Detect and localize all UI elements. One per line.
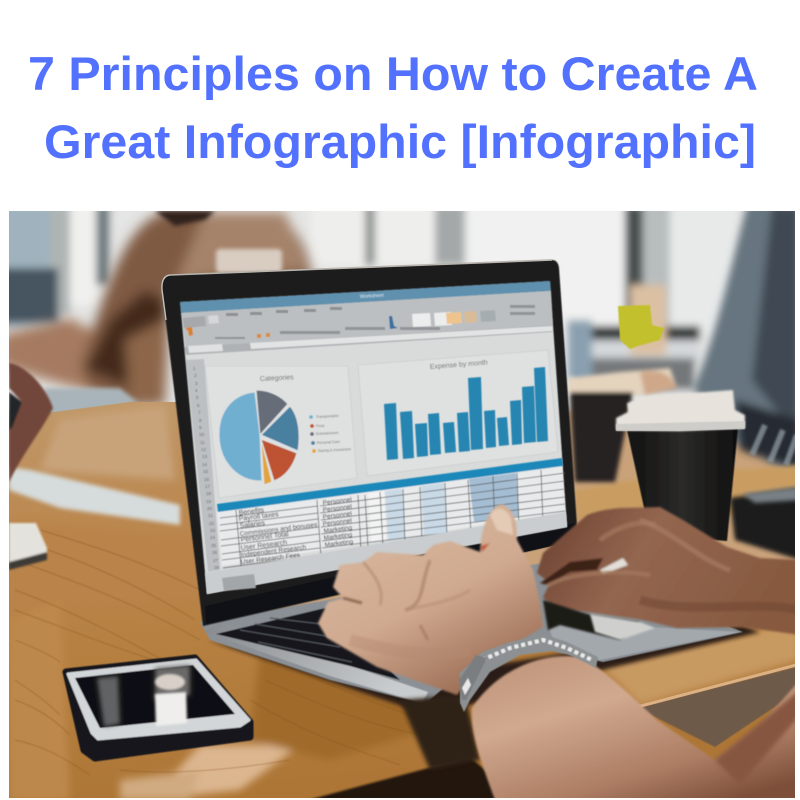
panel: expense chart (358, 350, 558, 476)
row numbers: 2 (194, 373, 197, 378)
table row labels: Commissions and bonuses (239, 521, 318, 538)
laptop screen (180, 281, 567, 594)
person sleeve right (693, 205, 800, 480)
table row labels (238, 507, 318, 566)
row numbers: 27 (213, 558, 219, 563)
photo: person working on a laptop at a wooden table (0, 200, 800, 800)
striped shirt (752, 425, 797, 465)
wooden table (9, 402, 800, 800)
ribbon (181, 291, 553, 349)
yellow blob (background object) (618, 305, 664, 349)
table strip behind right hand (575, 465, 800, 520)
papers on table left (9, 467, 180, 525)
pie chart (219, 390, 299, 485)
title: 7 Principles on How to Create A (28, 47, 758, 100)
grey object on table (44, 385, 138, 412)
row numbers: 16 (204, 477, 210, 482)
chart heading: expense: Expense by month (430, 359, 488, 371)
keyboard reflection (590, 614, 655, 640)
row numbers: 28 (214, 565, 220, 570)
row numbers: 20 (207, 506, 213, 511)
laptop (162, 260, 760, 712)
table corner box under arm (637, 666, 800, 747)
data table: Marketing (323, 525, 353, 535)
row numbers: 3 (195, 381, 198, 386)
notebook on left edge (9, 523, 47, 570)
table row labels: Personnel Total (240, 531, 289, 544)
table row labels: Independent Research (240, 544, 307, 559)
sheet tabs (205, 512, 567, 594)
table row labels: Salaries (239, 520, 266, 530)
hair dark tuft (155, 211, 215, 226)
dark object at right (730, 488, 800, 560)
table row labels: Payroll taxes (238, 511, 280, 523)
row numbers: 12 (201, 447, 207, 452)
row numbers: 6 (197, 403, 200, 408)
chart heading: categories: Categories (260, 374, 294, 383)
pie legend: Personal Care (317, 440, 340, 445)
data table: Personnel (322, 517, 353, 528)
row numbers (193, 366, 220, 570)
row numbers: 17 (205, 484, 211, 489)
title (28, 47, 758, 168)
title: Great Infographic [Infographic] (44, 115, 756, 168)
row numbers: 15 (203, 469, 209, 474)
row numbers: 10 (199, 432, 205, 437)
row numbers: 4 (195, 388, 198, 393)
data table: Marketing (323, 532, 353, 542)
row numbers: 7 (198, 410, 201, 415)
sheet (187, 332, 567, 594)
table row labels: Benefits (238, 507, 265, 517)
row numbers: 25 (211, 543, 217, 548)
row numbers: 24 (210, 535, 216, 540)
person with curly hair (background) (0, 212, 312, 405)
dark shadow below table edge (308, 757, 520, 800)
phone (66, 658, 250, 758)
pale object behind laptop (216, 249, 282, 273)
table row labels: User Research Fees (240, 552, 301, 566)
data table (205, 458, 567, 594)
right hand (537, 507, 800, 635)
highlighted cells (469, 473, 519, 522)
bar chart (384, 367, 548, 460)
wood grain (15, 530, 420, 775)
laptop lid (162, 260, 578, 626)
row numbers: 23 (210, 528, 216, 533)
pie legend: Transportation (316, 414, 339, 419)
dark gap beneath right hand (543, 600, 640, 640)
panel: categories chart (205, 366, 357, 498)
formula bar (184, 325, 553, 355)
row numbers: 5 (196, 395, 199, 400)
row numbers: 21 (208, 513, 214, 518)
row numbers: 9 (199, 425, 202, 430)
blurred cafe background (0, 200, 800, 410)
table body (217, 466, 565, 566)
table row labels: User Research (240, 539, 288, 552)
front coffee cup (616, 390, 745, 541)
row numbers: 11 (200, 440, 205, 445)
rear coffee cup (568, 368, 677, 482)
left person hand with device (9, 363, 53, 482)
data table: Personnel (322, 496, 353, 507)
laptop screen: Worksheet (360, 293, 384, 300)
pie legend: Entertainment (316, 431, 338, 436)
left hand (318, 504, 543, 695)
title bar (180, 281, 551, 313)
wristwatch (459, 634, 598, 712)
pie legend: Food (316, 424, 324, 428)
pie legend: Saving & Investment (318, 447, 351, 453)
table header (217, 458, 563, 512)
laptop base and keyboard (200, 560, 743, 704)
forearm (472, 656, 800, 800)
row numbers: 14 (202, 462, 208, 467)
row numbers: 18 (206, 491, 212, 496)
row numbers: 26 (212, 550, 218, 555)
pie legend (309, 414, 351, 453)
row numbers: 22 (209, 521, 215, 526)
row numbers: 1 (193, 366, 196, 371)
data table: Personnel (322, 503, 353, 514)
data table: Personnel (322, 510, 353, 521)
row numbers: 8 (199, 418, 202, 423)
shadow under laptop base (208, 625, 760, 712)
row numbers: 13 (202, 454, 208, 459)
row numbers: 19 (206, 499, 212, 504)
data table: Marketing (324, 539, 354, 549)
